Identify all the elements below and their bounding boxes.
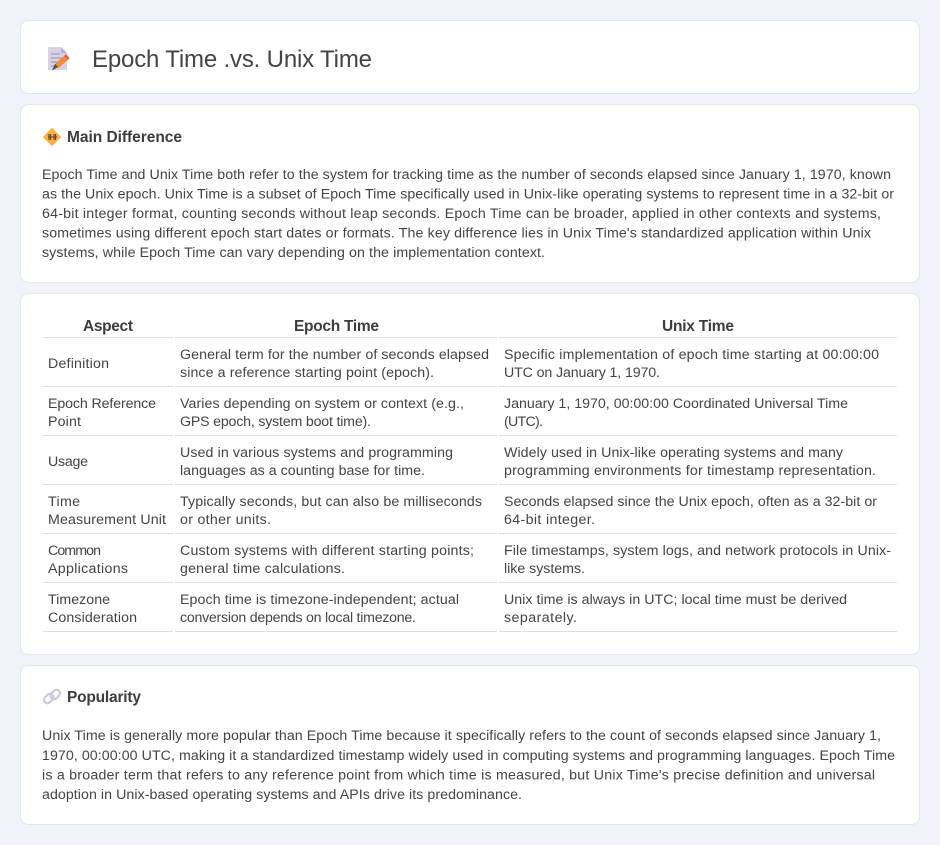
- row: usage: Used in various systems and programming: [180, 445, 453, 461]
- icon: document with pencil: [48, 47, 70, 70]
- row: common applications: File timestamps, system logs, and network protocols in Unix-: [504, 543, 891, 559]
- row: definition: [48, 347, 879, 381]
- row: definition: UTC on January 1, 1970.: [504, 365, 660, 381]
- text block: main difference paragraph: as the Unix epoch. Unix Time is a subset of Epoch Time specifically used in Unix-like operating systems to represent time in a 32-bit or: [42, 186, 894, 202]
- row: epoch reference point: Varies depending on system or context (e.g.,: [180, 396, 464, 412]
- text block: popularity paragraph: is a broader term that refers to any reference point from which time is measured, but Unix Time's precise definition and universal: [42, 768, 875, 784]
- row: timezone consideration: Timezone: [48, 592, 110, 608]
- heading: popularity: Popularity: [67, 689, 141, 706]
- table header: Epoch Time: [294, 318, 379, 335]
- row: usage: [48, 445, 876, 479]
- row: timezone consideration: Consideration: [48, 610, 137, 626]
- panel: main difference: [20, 104, 920, 282]
- row: epoch reference point: January 1, 1970, 00:00:00 Coordinated Universal Time: [504, 396, 848, 412]
- title text: Epoch Time .vs. Unix Time: [92, 46, 372, 73]
- row: definition: Specific implementation of epoch time starting at 00:00:00: [504, 347, 879, 363]
- row: common applications: Custom systems with different starting points;: [180, 543, 474, 559]
- text block: main difference paragraph: systems, while Epoch Time can vary depending on the implementation context.: [42, 245, 545, 261]
- row: definition: Definition: [48, 356, 109, 372]
- text block: main difference paragraph: sometimes using different epoch start dates or formats. The key difference lies in Unix Time's standardized application within Unix: [42, 226, 871, 242]
- row: common applications: like systems.: [504, 561, 585, 577]
- row: common applications: Common: [48, 543, 101, 559]
- row: common applications: [48, 543, 891, 577]
- row: time measurement unit: or other units.: [180, 512, 271, 528]
- table header: Unix Time: [662, 318, 734, 335]
- row: common applications: Applications: [48, 561, 128, 577]
- text block: popularity paragraph: [42, 728, 895, 803]
- row: common applications: general time calculations.: [180, 561, 345, 577]
- row: timezone consideration: separately.: [504, 610, 577, 626]
- table row lines: [43, 337, 897, 632]
- text block: main difference paragraph: [42, 167, 894, 261]
- text block: popularity paragraph: adoption in Unix-based operating systems and APIs drive its predominance.: [42, 787, 522, 803]
- panel: title: [20, 20, 920, 94]
- row: time measurement unit: Time: [48, 494, 80, 510]
- row: epoch reference point: Epoch Reference: [48, 396, 156, 412]
- table header: [83, 318, 734, 335]
- panel: popularity: [20, 666, 920, 824]
- heading: main difference: Main Difference: [67, 129, 182, 146]
- row: usage: Usage: [48, 454, 88, 470]
- icon: orange diamond: [44, 128, 60, 146]
- row: time measurement unit: [48, 494, 877, 528]
- row: time measurement unit: Typically seconds, but can also be milliseconds: [180, 494, 482, 510]
- row: time measurement unit: 64-bit integer.: [504, 512, 595, 528]
- row: epoch reference point: (UTC).: [504, 414, 543, 430]
- row: timezone consideration: conversion depends on local timezone.: [180, 610, 416, 626]
- row: time measurement unit: Seconds elapsed since the Unix epoch, often as a 32-bit or: [504, 494, 877, 510]
- row: definition: since a reference starting point (epoch).: [180, 365, 434, 381]
- row: epoch reference point: GPS epoch, system boot time).: [180, 414, 371, 430]
- table header: Aspect: [83, 318, 133, 335]
- row: timezone consideration: Unix time is always in UTC; local time must be derived: [504, 592, 847, 608]
- text block: popularity paragraph: 1970, 00:00:00 UTC, making it a standardized timestamp widely used in computing systems and programming languages. Epoch Time: [42, 748, 895, 764]
- row: epoch reference point: [48, 396, 848, 430]
- row: usage: languages as a counting base for time.: [180, 463, 425, 479]
- row: timezone consideration: Epoch time is timezone-independent; actual: [180, 592, 459, 608]
- panel: comparison table: [20, 294, 920, 654]
- row: timezone consideration: [48, 592, 847, 626]
- row: time measurement unit: Measurement Unit: [48, 512, 166, 528]
- row: definition: General term for the number of seconds elapsed: [180, 347, 489, 363]
- row: usage: Widely used in Unix-like operating systems and many: [504, 445, 844, 461]
- row: usage: programming environments for timestamp representation.: [504, 463, 876, 479]
- row: epoch reference point: Point: [48, 414, 81, 430]
- text block: main difference paragraph: Epoch Time and Unix Time both refer to the system for tracking time as the number of seconds elapsed since January 1, 1970, known: [42, 167, 891, 183]
- text block: popularity paragraph: Unix Time is generally more popular than Epoch Time because it specifically refers to the count of seconds elapsed since January 1,: [42, 728, 881, 744]
- text block: main difference paragraph: 64-bit integer format, counting seconds without leap seconds. Epoch Time can be broader, applied in other contexts and systems,: [42, 206, 881, 222]
- icon: chain link: [43, 688, 61, 705]
